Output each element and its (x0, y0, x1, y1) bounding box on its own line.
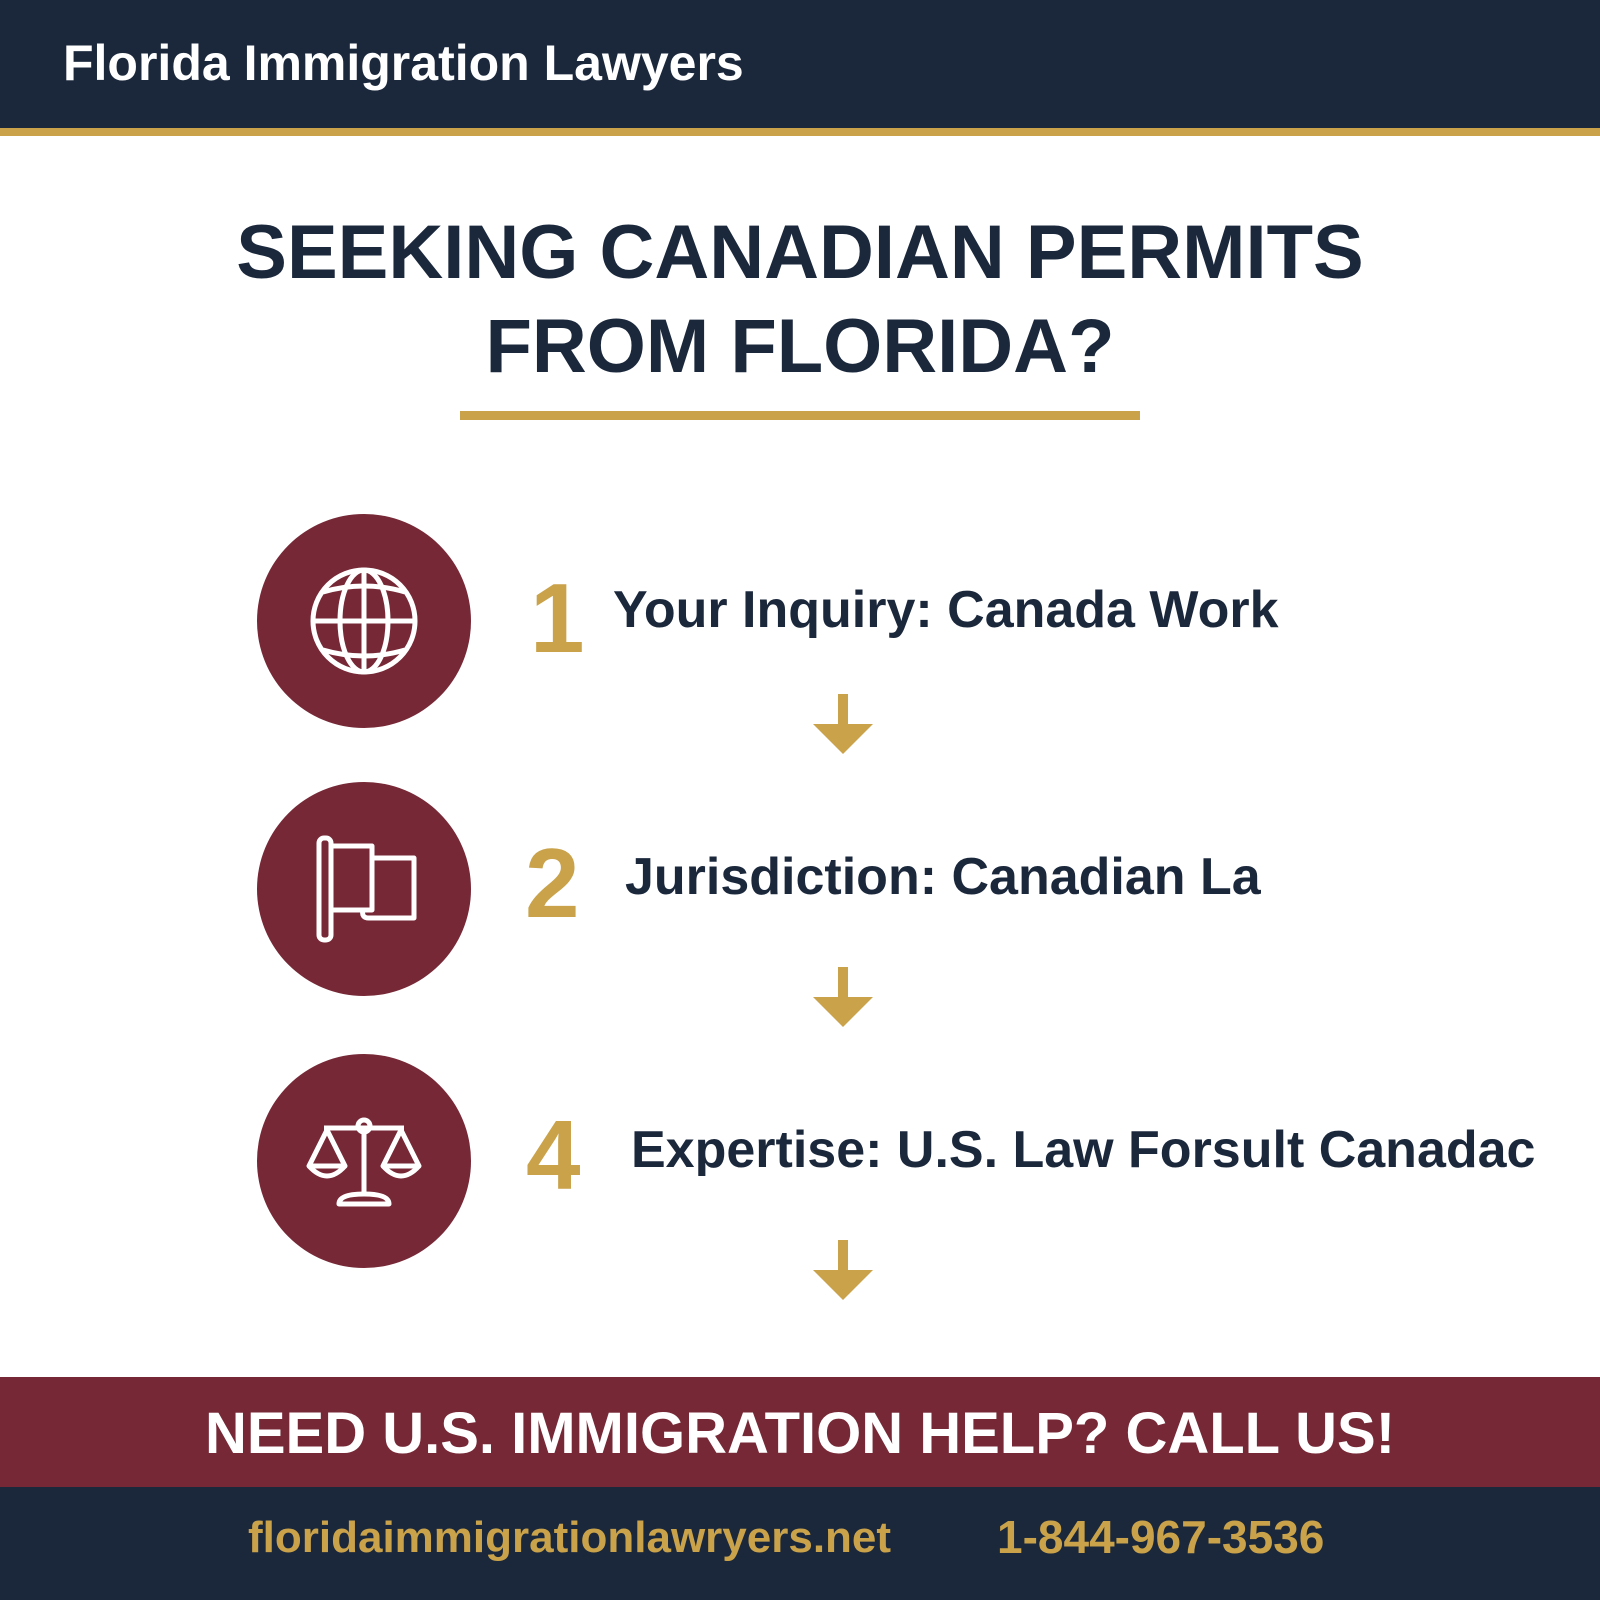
website: floridaimmigrationlawryers.net (248, 1513, 891, 1562)
footer bar (0, 1487, 1600, 1600)
title underline (460, 411, 1140, 420)
arrow 2 (813, 967, 873, 1027)
cta text: NEED U.S. IMMIGRATION HELP? CALL US! (205, 1401, 1395, 1466)
call to action band (0, 1377, 1600, 1487)
phone: 1-844-967-3536 (997, 1511, 1324, 1563)
header title: Florida Immigration Lawyers (63, 35, 744, 91)
icon: scales (257, 1054, 471, 1268)
main title: SEEKING CANADIAN PERMITS (236, 210, 1364, 295)
main title: FROM FLORIDA? (485, 304, 1114, 389)
step 3 (257, 1054, 1535, 1268)
arrow 1 (813, 694, 873, 754)
icon: globe (257, 514, 471, 728)
number 1: 1 (530, 563, 585, 673)
step text 1: Your Inquiry: Canada Work (613, 581, 1278, 639)
step text 2: Jurisdiction: Canadian La (625, 848, 1261, 906)
gold header rule (0, 128, 1600, 136)
step 2 (257, 782, 1261, 996)
number 2: 2 (525, 828, 580, 938)
main title (236, 210, 1364, 389)
header bar (0, 0, 1600, 130)
arrow 3 (813, 1240, 873, 1300)
number 4: 4 (526, 1100, 581, 1210)
icon: flag (257, 782, 471, 996)
step 1 (257, 514, 1278, 728)
